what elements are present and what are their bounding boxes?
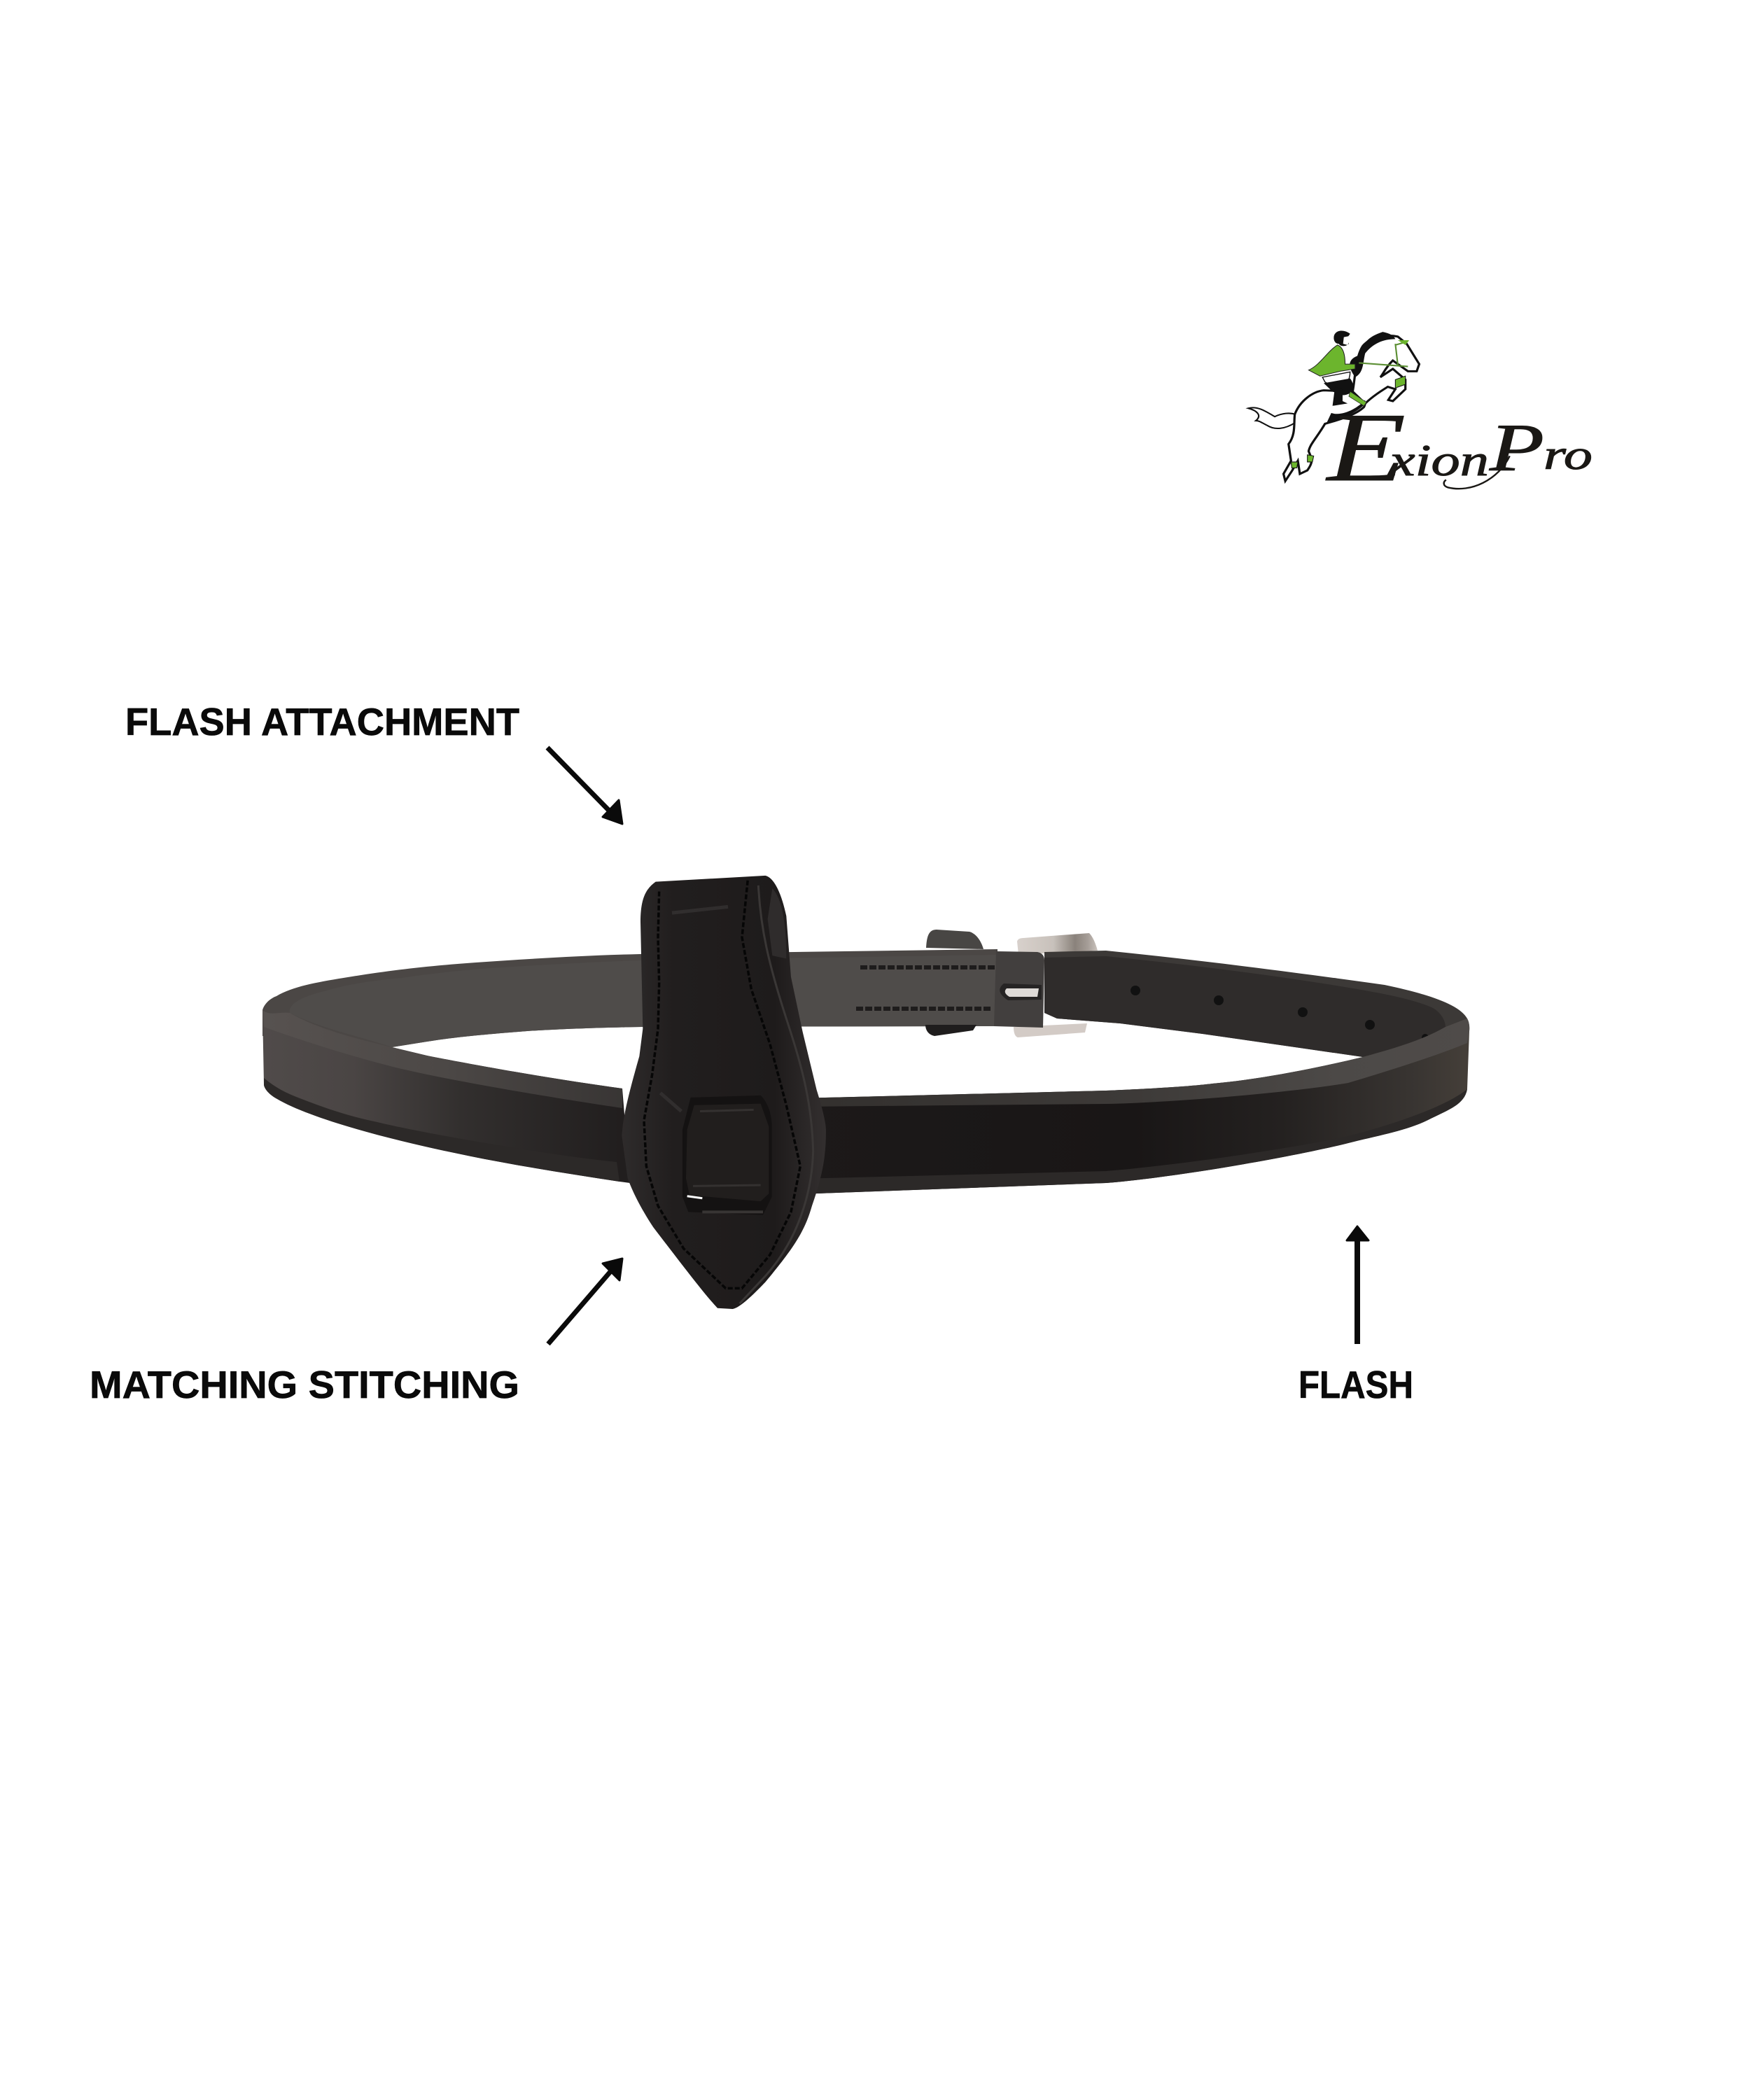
loop through window bbox=[686, 1104, 769, 1201]
strap: front band left bbox=[262, 1010, 630, 1183]
buckle bbox=[1014, 933, 1098, 1037]
leather highlight bbox=[660, 906, 728, 1112]
strap: front band right bbox=[798, 1018, 1469, 1194]
label: flash: FLASH bbox=[1298, 1363, 1413, 1406]
matching stitching line bbox=[644, 879, 800, 1288]
logo horse and rider bbox=[1248, 331, 1510, 489]
arrow: flash attachment bbox=[547, 748, 622, 824]
label: matching stitching: MATCHING STITCHING bbox=[90, 1363, 519, 1406]
keepers bbox=[925, 930, 983, 1036]
strap end and stitching bbox=[856, 951, 1044, 1028]
arrow: flash bbox=[1347, 1226, 1368, 1344]
logo wordmark: xion bbox=[1389, 435, 1489, 485]
logo wordmark: E bbox=[1325, 393, 1406, 502]
keeper inner loop opening bbox=[768, 888, 786, 959]
logo: ExionPro bbox=[1248, 331, 1592, 502]
arrow: matching stitching bbox=[548, 1259, 622, 1344]
strap: back left inner bbox=[262, 949, 997, 1047]
logo wordmark bbox=[1325, 393, 1592, 502]
product: leather flash strap bbox=[262, 876, 1469, 1309]
logo wordmark: P bbox=[1489, 410, 1544, 485]
logo wordmark: ro bbox=[1544, 432, 1592, 478]
flash attachment keeper bbox=[622, 876, 826, 1309]
label: flash attachment: FLASH ATTACHMENT bbox=[125, 700, 519, 743]
centre window bbox=[682, 1096, 772, 1215]
raised edge bbox=[740, 886, 813, 1303]
strap: back right with holes bbox=[1044, 951, 1467, 1057]
